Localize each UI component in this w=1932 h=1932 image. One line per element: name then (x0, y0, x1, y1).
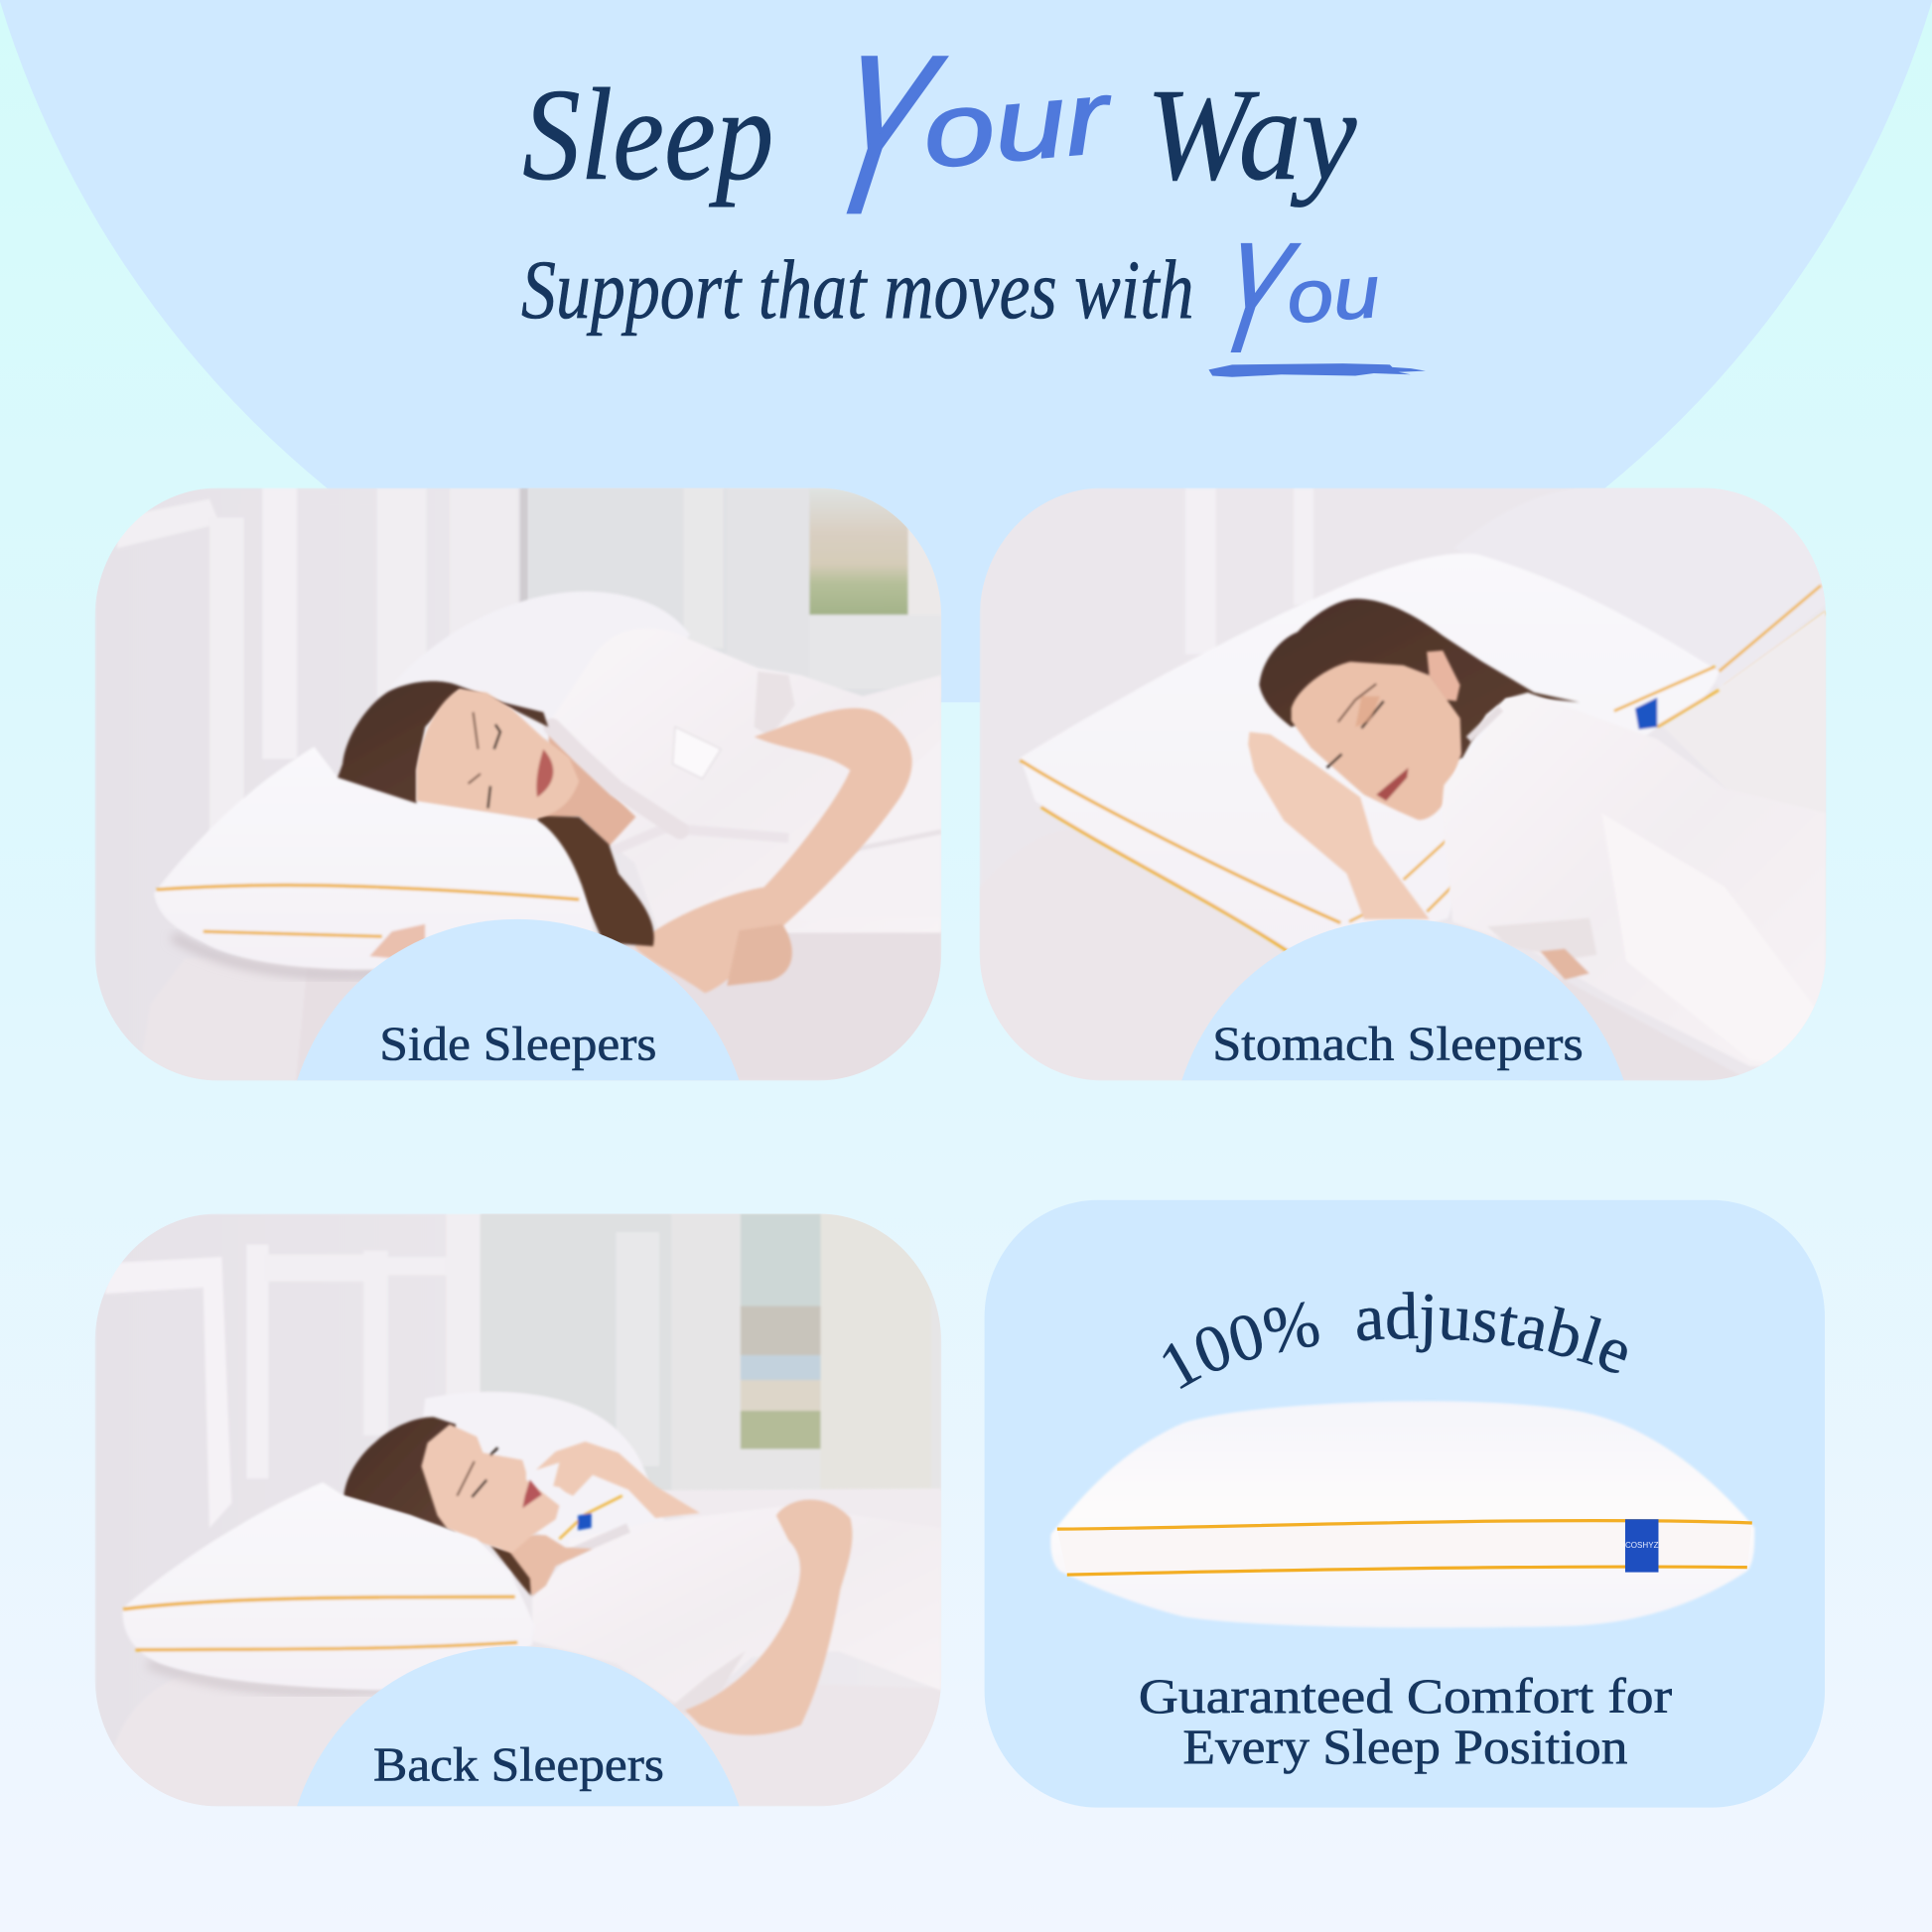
panel: 100% adjustable product card (985, 1199, 1825, 1807)
photo face and ear (1292, 650, 1461, 820)
brush underline (1208, 363, 1426, 377)
photo arm and hand (634, 708, 912, 993)
photo satin shirt (1443, 692, 1826, 1072)
photo hair (338, 681, 548, 803)
panel: stomach sleepers (980, 487, 1826, 1080)
photo back pillow with piping (1718, 584, 1827, 679)
photo door and window (530, 488, 909, 695)
label arch (297, 1646, 740, 1806)
label: Stomach Sleepers: Stomach Sleepers (1212, 1018, 1584, 1070)
label arch (1181, 919, 1624, 1080)
photo lace collar (552, 727, 680, 830)
photo main pillow (1021, 553, 1719, 951)
photo cabinet and window (481, 1213, 941, 1491)
photo bed (627, 933, 941, 1080)
orange piping (1057, 1521, 1752, 1575)
photo pillow shadow (148, 1663, 492, 1691)
photo pillow shadow (171, 932, 371, 981)
photo neck (492, 1534, 593, 1595)
photo satin shirt (532, 1506, 941, 1716)
photo wall (980, 487, 1826, 1080)
photo main pillow (123, 1482, 535, 1691)
caption: Guaranteed Comfort for Every Sleep Position: Guaranteed Comfort for (1139, 1669, 1673, 1724)
photo hair tail (490, 1545, 531, 1595)
subtitle: Support that moves with You: Y (1194, 212, 1312, 385)
photo back pillow (425, 592, 689, 739)
title: Sleep Your Way: Sleep (522, 62, 773, 207)
photo face (421, 1425, 559, 1553)
photo long hair (537, 816, 654, 946)
title: Sleep Your Way: Way (1146, 62, 1356, 207)
header backdrop: large circle (0, 0, 1932, 716)
title: Sleep Your Way: our (918, 59, 1118, 191)
photo main pillow (154, 747, 594, 969)
subtitle: Support that moves with You: ou (1284, 250, 1382, 339)
subtitle: Support that moves with You (521, 212, 1382, 385)
caption: Guaranteed Comfort for Every Sleep Position (1139, 1669, 1673, 1774)
photo hand and forearm (1248, 732, 1430, 919)
photo back pillow (419, 1392, 665, 1553)
photo hair (1259, 599, 1580, 763)
caption: Guaranteed Comfort for Every Sleep Position: Every Sleep Position (1182, 1720, 1628, 1774)
label: Back Sleepers: Back Sleepers (373, 1738, 664, 1791)
photo lower bed pillow (980, 829, 1307, 1080)
panel: back sleepers (95, 1213, 941, 1806)
photo wall (95, 1213, 931, 1747)
photo bed right side (1624, 611, 1826, 1080)
photo bed (113, 1488, 941, 1806)
panel: side sleepers (95, 487, 941, 1080)
photo neck (542, 732, 635, 847)
subtitle: Support that moves with You: Support that moves with (521, 244, 1194, 337)
photo face (416, 689, 579, 819)
photo satin shirt (580, 639, 941, 933)
label arch (297, 919, 740, 1080)
brand text: COSHYZ (1625, 1541, 1659, 1550)
card background (985, 1200, 1825, 1808)
photo wall (95, 488, 657, 1052)
label: Side Sleepers: Side Sleepers (379, 1018, 656, 1070)
curved heading: 100% adjustable: 100% adjustable (1163, 1292, 1627, 1389)
photo hair (344, 1417, 456, 1534)
photo small pillow piping (559, 1496, 622, 1539)
title: Sleep Your Way: Y (794, 9, 965, 259)
gusset shade (1057, 1521, 1752, 1575)
title: Sleep Your Way (522, 9, 1356, 259)
blue brand label (1625, 1519, 1658, 1573)
photo arm and hands (536, 1442, 852, 1735)
product pillow (1050, 1401, 1754, 1628)
